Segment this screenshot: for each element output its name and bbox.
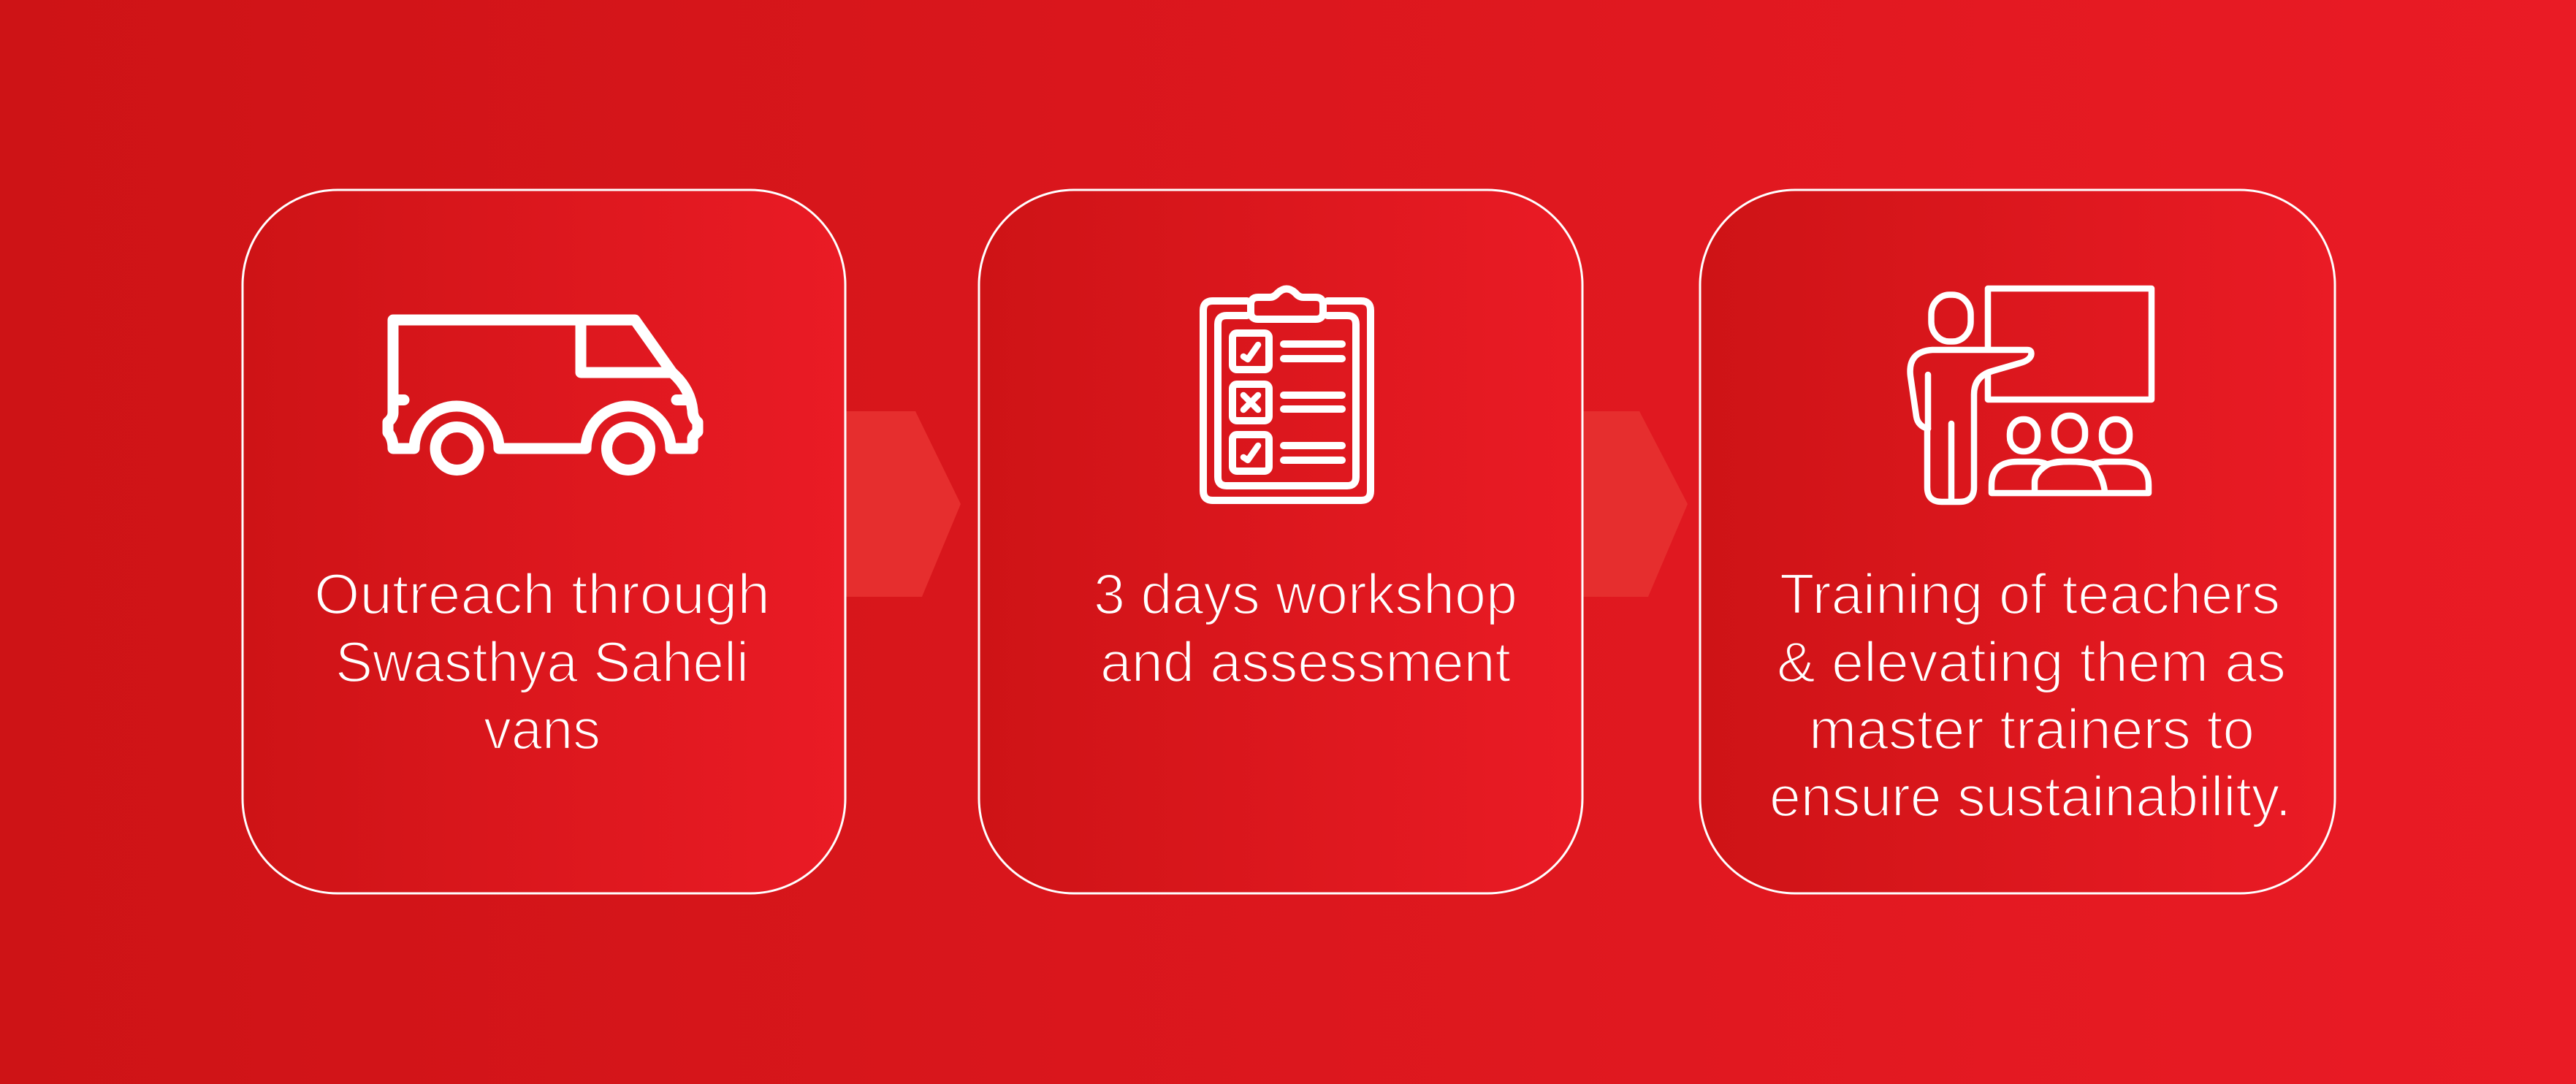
arrow: step 1 to step 2	[840, 411, 961, 597]
text: outreach label	[314, 562, 770, 761]
icon: teacher at board with students	[1910, 289, 2152, 502]
text: training label	[1769, 562, 2291, 828]
text: outreach label: Swasthya Saheli	[335, 630, 749, 694]
text: workshop label	[1094, 562, 1517, 694]
text: training label: ensure sustainability.	[1769, 764, 2291, 828]
panel: training of teachers	[1700, 190, 2335, 893]
panel: outreach vans	[243, 190, 845, 893]
text: training label: & elevating them as	[1777, 630, 2286, 694]
icon: van	[388, 320, 698, 470]
arrow: step 2 to step 3	[1578, 411, 1688, 597]
panel: workshop and assessment	[979, 190, 1582, 893]
text: outreach label: Outreach through	[314, 562, 770, 626]
icon: clipboard checklist	[1203, 289, 1371, 500]
text: training label: master trainers to	[1809, 697, 2255, 761]
text: outreach label: vans	[484, 697, 601, 761]
text: workshop label: 3 days workshop	[1094, 562, 1517, 626]
text: workshop label: and assessment	[1100, 630, 1511, 694]
text: training label: Training of teachers	[1780, 562, 2280, 626]
